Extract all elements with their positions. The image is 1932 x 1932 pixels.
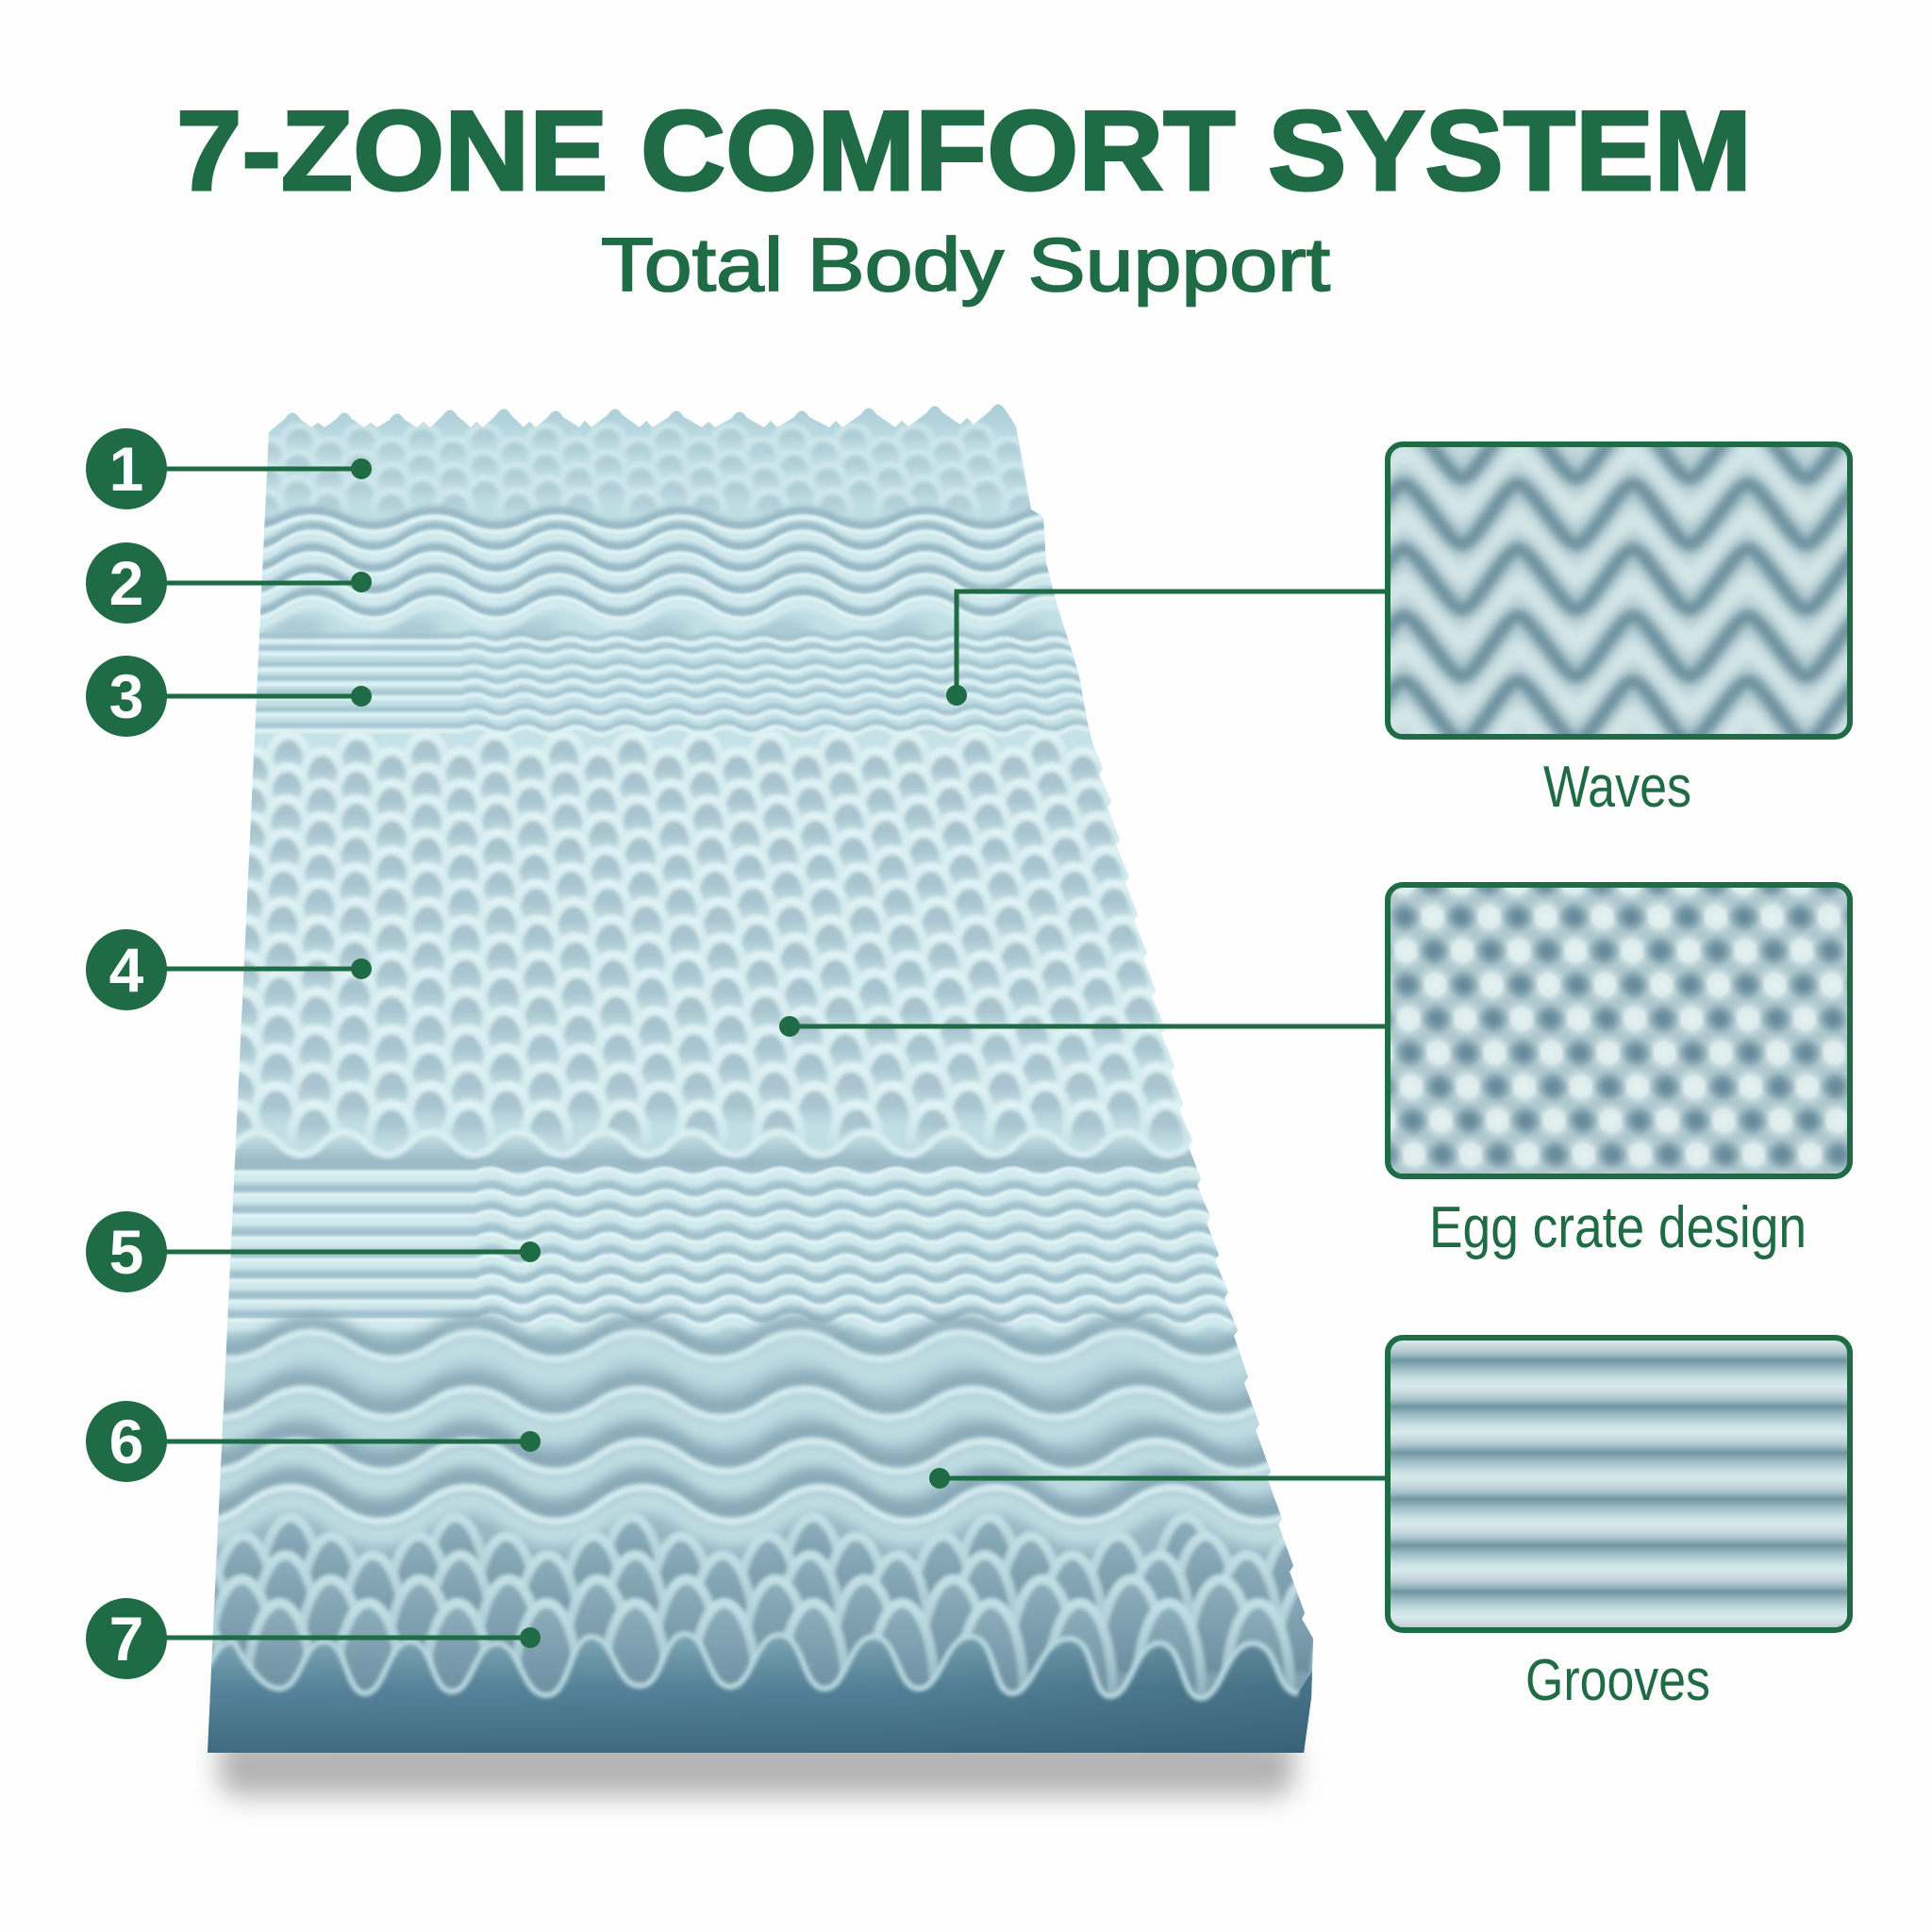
zone marker 3 with leader: 3 <box>109 661 143 731</box>
label: grooves: Grooves <box>1525 1648 1710 1713</box>
zone marker 4 with leader <box>86 929 372 1010</box>
label: waves: Waves <box>1543 755 1691 820</box>
zone 6 wave surface <box>70 1323 1392 1535</box>
connector: waves panel to mattress <box>946 591 1387 706</box>
zone marker 7 with leader <box>86 1598 541 1679</box>
title: 7-ZONE COMFORT SYSTEM <box>176 88 1752 214</box>
zone marker 2 with leader: 2 <box>109 548 143 618</box>
front face right-side shading <box>946 1641 1312 1753</box>
zone 4 egg crate surface <box>234 728 1198 1170</box>
zone marker 5 with leader: 5 <box>109 1217 143 1287</box>
panel: waves <box>1385 441 1853 740</box>
front crest highlight <box>209 1634 1298 1698</box>
zone marker 1 with leader <box>86 428 372 509</box>
label: egg crate design: Egg crate design <box>1429 1195 1807 1260</box>
mattress base surface <box>189 396 1340 1755</box>
subtitle: Total Body Support <box>601 223 1330 307</box>
zone 1 egg crate surface <box>265 423 1031 511</box>
zone marker 7 with leader: 7 <box>109 1604 143 1674</box>
zone 7 egg crate surface <box>209 1512 1313 1696</box>
zone 3 groove surface <box>238 634 1115 735</box>
zone marker 6 with leader: 6 <box>109 1407 143 1476</box>
zone marker 6 with leader <box>86 1401 541 1482</box>
zone marker 1 with leader: 1 <box>109 434 143 504</box>
mattress front face <box>208 1634 1313 1755</box>
zone marker 4 with leader: 4 <box>109 935 144 1005</box>
panel: grooves <box>1388 1338 1850 1630</box>
connector: grooves panel to mattress <box>929 1468 1387 1489</box>
connector: egg crate panel to mattress <box>779 1016 1387 1037</box>
mattress topper illustration <box>208 404 1313 1753</box>
zone marker 2 with leader <box>86 542 372 624</box>
zone 5 groove surface <box>208 1162 1257 1331</box>
zone 2 wave surface <box>260 504 1058 636</box>
zone 4 front ridge <box>189 1132 1234 1174</box>
zone marker 5 with leader <box>86 1211 541 1292</box>
zone marker 3 with leader <box>86 656 372 737</box>
panel: egg crate design <box>1388 885 1850 1176</box>
mattress floor shadow <box>219 1734 1294 1796</box>
